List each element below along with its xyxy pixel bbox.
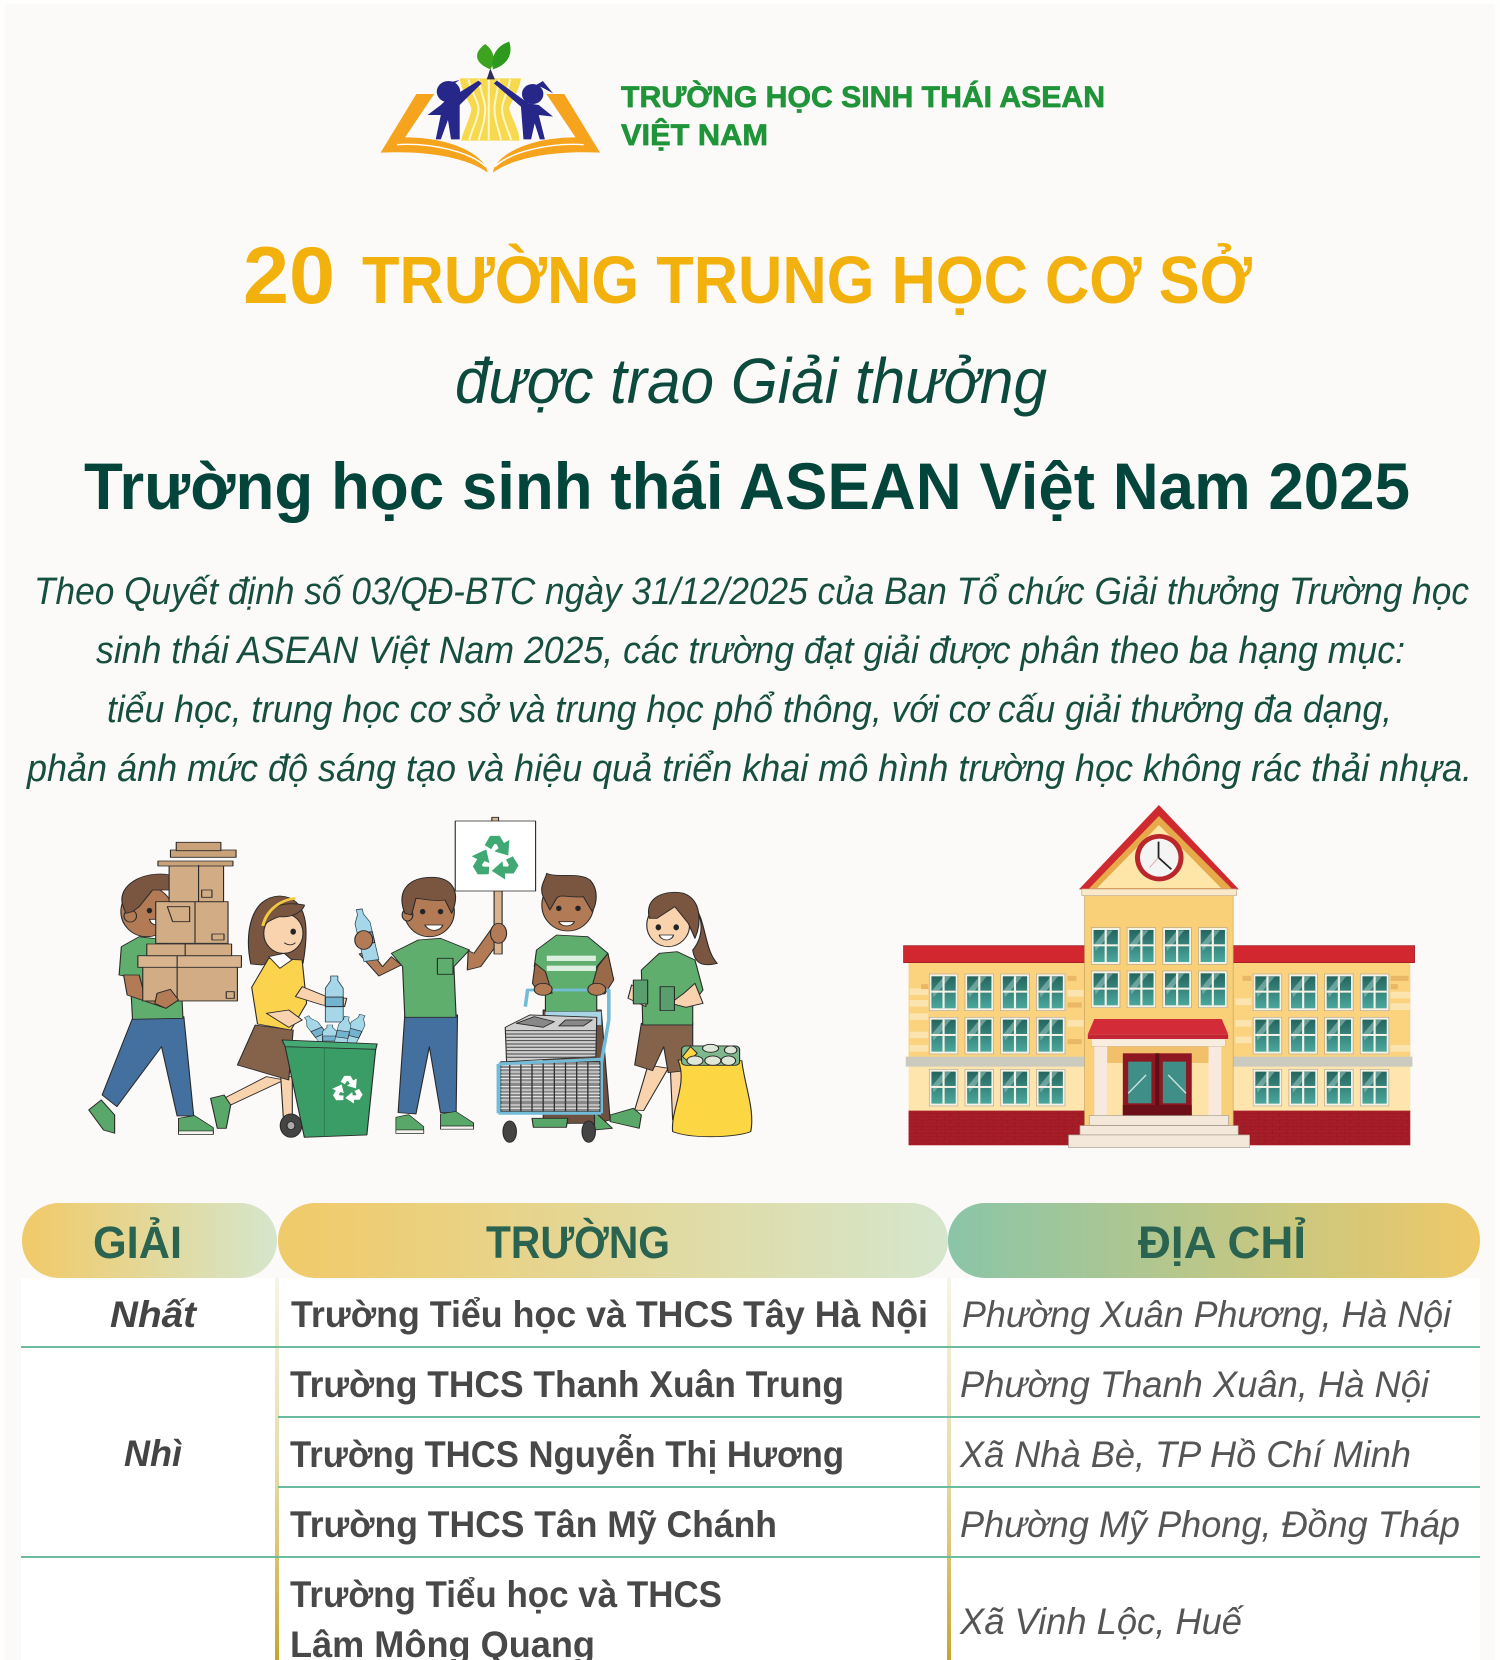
title line 2: được trao Giải thưởng [455,345,1047,417]
row lines [21,1346,1480,1558]
logo mark: book, wheat, children and tree [381,42,600,173]
column dividers [275,1278,951,1660]
title line 3: Trường học sinh thái ASEAN Việt Nam 2025 [84,449,1410,523]
logo text: VIỆT NAM [621,118,768,152]
row: giải nhất: Nhất [110,1294,198,1335]
wings [904,946,1415,1145]
intro paragraph: sinh thái ASEAN Việt Nam 2025, các trường đạt giải được phân theo ba hạng mục: [96,630,1405,672]
row: Tân Mỹ Chánh [290,1504,1460,1545]
row: Nguyễn Thị Hương: Xã Nhà Bè, TP Hồ Chí Minh [959,1434,1411,1475]
row: giải nhất: Trường Tiểu học và THCS Tây Hà Nội [291,1294,928,1335]
boy carrying boxes [89,842,241,1134]
title block [84,231,1410,523]
row: Tân Mỹ Chánh: Trường THCS Tân Mỹ Chánh [290,1504,777,1545]
girl with cans and yellow sack [610,892,752,1137]
table [21,1203,1480,1660]
row: Nguyễn Thị Hương [290,1434,1411,1475]
girl with bottles [211,896,347,1128]
row: giải nhất [110,1294,1453,1335]
logo [381,42,1105,173]
header: địa chỉ: ĐỊA CHỈ [1138,1217,1306,1268]
pediment and clock [1079,805,1239,889]
boy with cart [499,873,614,1142]
row: Tân Mỹ Chánh: Phường Mỹ Phong, Đồng Tháp [960,1504,1460,1545]
illustration: children recycling [89,817,752,1142]
header: địa chỉ [948,1203,1480,1278]
illustration: school building [904,805,1415,1148]
row: Thanh Xuân Trung [290,1364,1431,1405]
title line 1: 20 [243,231,335,321]
rank: giải nhì: Nhì [124,1433,183,1474]
central tower [1082,889,1236,1126]
row: Lâm Mông Quang: Xã Vinh Lộc, Huế [959,1601,1244,1642]
header: trường: TRƯỜNG [486,1217,670,1268]
header: giải [22,1203,277,1278]
logo text [621,80,1105,152]
boy with sign [352,817,536,1133]
green recycling bin [280,1040,377,1137]
windows [929,928,1389,1106]
row: Thanh Xuân Trung: Trường THCS Thanh Xuân Trung [290,1364,844,1405]
table body background [21,1278,1480,1660]
row: Thanh Xuân Trung: Phường Thanh Xuân, Hà Nội [960,1364,1431,1405]
title line 1 [243,231,1253,321]
intro paragraph [26,571,1472,790]
logo text: TRƯỜNG HỌC SINH THÁI ASEAN [621,80,1105,114]
row: Nguyễn Thị Hương: Trường THCS Nguyễn Thị Hương [290,1434,844,1475]
header: giải: GIẢI [93,1217,182,1268]
row: giải nhất: Phường Xuân Phương, Hà Nội [962,1294,1453,1335]
row: Lâm Mông Quang: Trường Tiểu học và THCS [290,1574,722,1615]
entrance portico and door [1088,1019,1228,1116]
header: trường [278,1203,948,1278]
intro paragraph: tiểu học, trung học cơ sở và trung học phổ thông, với cơ cấu giải thưởng đa dạng, [107,689,1392,731]
plastic bottles [301,976,369,1049]
row: Lâm Mông Quang [290,1574,1244,1660]
steps [1069,1116,1250,1148]
title line 1: TRƯỜNG TRUNG HỌC CƠ SỞ [362,243,1253,318]
